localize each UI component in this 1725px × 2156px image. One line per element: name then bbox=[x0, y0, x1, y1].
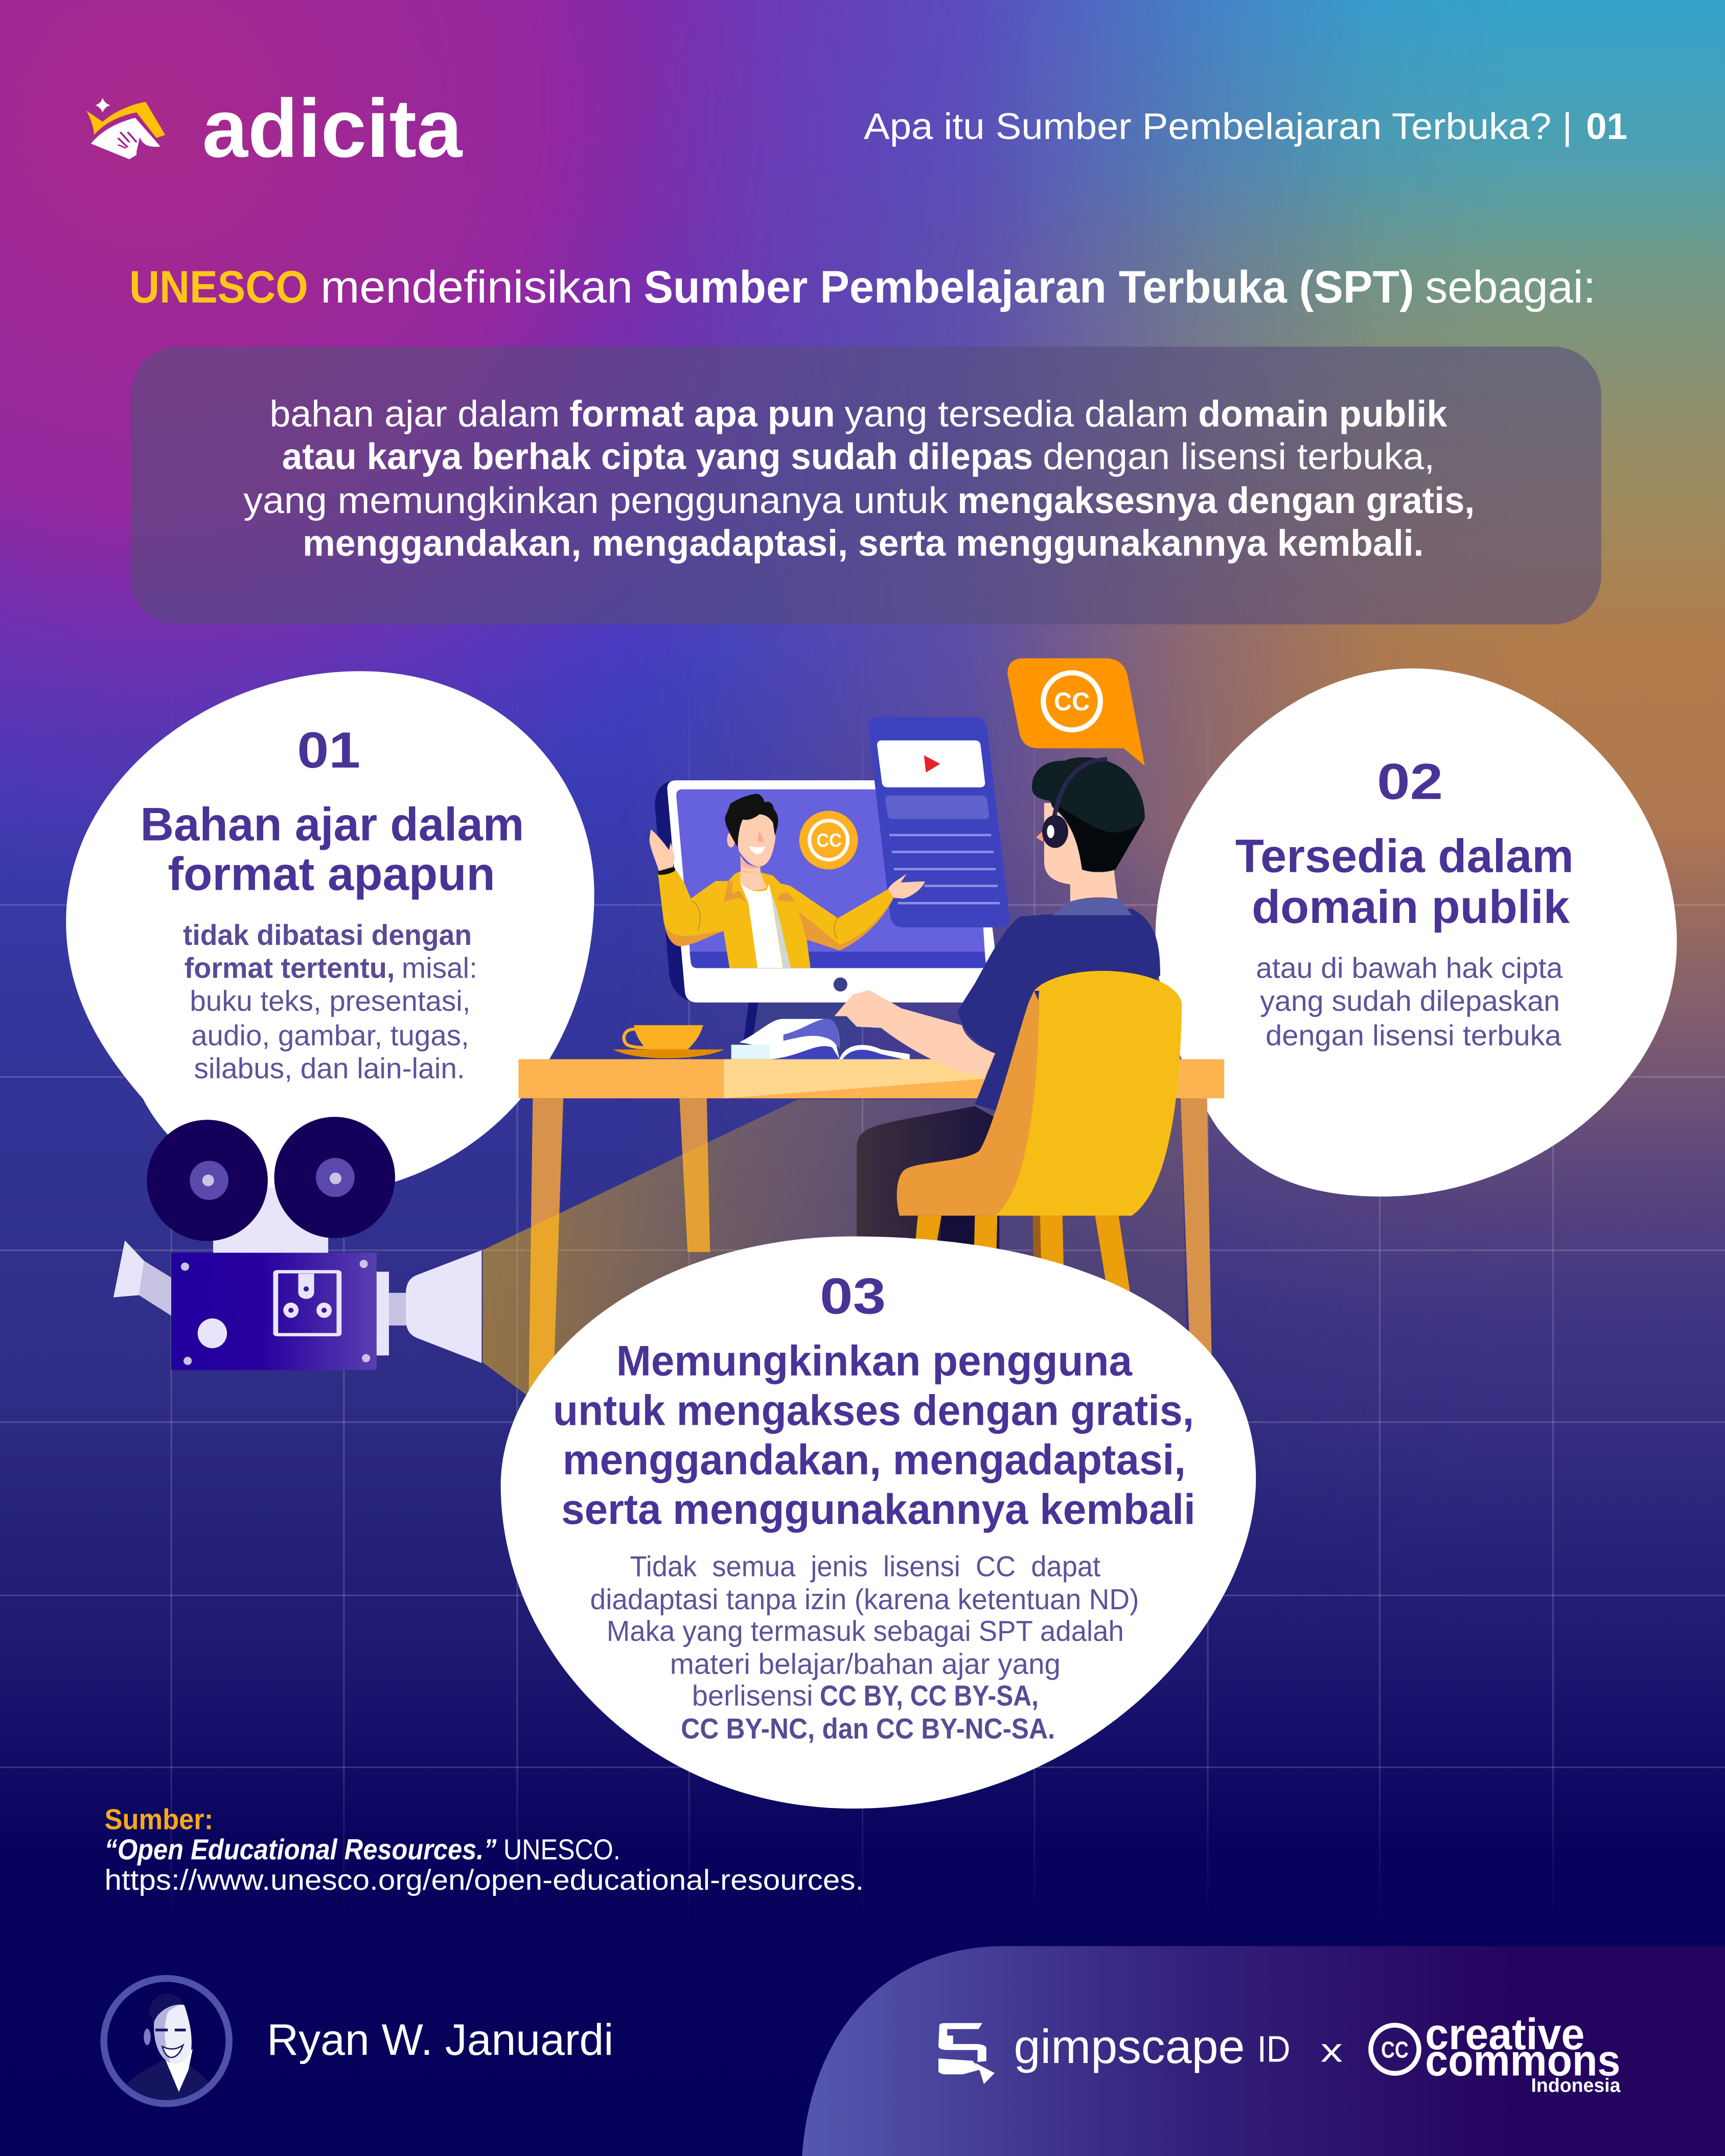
monitor bbox=[655, 780, 995, 1048]
heading 03: untuk mengakses dengan gratis, bbox=[553, 1386, 1194, 1434]
main title: Sumber Pembelajaran Terbuka (SPT) bbox=[644, 262, 1414, 312]
main title bbox=[129, 262, 1596, 312]
definition text: domain publik bbox=[1198, 393, 1447, 434]
source citation: “Open Educational Resources.” bbox=[105, 1834, 497, 1866]
icon: gimpscape bbox=[938, 2023, 995, 2084]
body 03: Maka yang termasuk sebagai SPT adalah bbox=[607, 1615, 1124, 1647]
panel: point 02 bubble bbox=[1156, 668, 1677, 1196]
creative commons logo: commons bbox=[1425, 2036, 1620, 2085]
header: series title: Apa itu Sumber Pembelajaran Terbuka? | bbox=[864, 106, 1572, 147]
wordmark: adicita bbox=[202, 83, 463, 175]
creative commons logo: CC bbox=[1381, 2036, 1409, 2062]
number 01: 01 bbox=[297, 722, 360, 779]
body 01 bbox=[183, 919, 477, 1084]
desk top bbox=[519, 1059, 1224, 1098]
chair bbox=[897, 971, 1182, 1304]
right table leg bbox=[1181, 1098, 1212, 1378]
body 03: CC BY, CC BY-SA, bbox=[820, 1679, 1039, 1711]
film reel right bbox=[274, 1117, 395, 1238]
definition text: bahan ajar dalam bbox=[270, 393, 560, 434]
learner figure bbox=[834, 757, 1160, 1304]
definition text: dengan lisensi terbuka, bbox=[1043, 436, 1435, 477]
body 02: yang sudah dilepaskan bbox=[1260, 985, 1560, 1017]
open book bbox=[731, 1019, 910, 1059]
definition text: yang tersedia dalam bbox=[845, 393, 1188, 434]
source citation bbox=[105, 1803, 864, 1896]
icon: cc speech bubble bbox=[1007, 658, 1145, 766]
table legs bbox=[528, 1098, 710, 1392]
camera back bbox=[139, 1261, 171, 1316]
panel: point 03 bubble bbox=[501, 1237, 1256, 1809]
gimpscape wordmark: gimpscape bbox=[1014, 2020, 1245, 2073]
heading 02 bbox=[1235, 830, 1574, 933]
header: logo adicita bbox=[86, 83, 463, 175]
body 03: CC BY-NC, dan CC BY-NC-SA. bbox=[681, 1712, 1055, 1745]
heading 03: Memungkinkan pengguna bbox=[616, 1336, 1133, 1384]
definition text: menggandakan, mengadaptasi, serta menggunakannya kembali. bbox=[303, 522, 1424, 564]
definition text: yang memungkinkan penggunanya untuk bbox=[243, 480, 948, 521]
body 02: atau di bawah hak cipta bbox=[1256, 952, 1563, 984]
creative commons logo: Indonesia bbox=[1531, 2075, 1621, 2096]
body 02 bbox=[1256, 952, 1563, 1051]
main title: mendefinisikan bbox=[320, 262, 633, 312]
heading 03 bbox=[553, 1336, 1195, 1533]
camera lens bbox=[377, 1250, 481, 1363]
heading 01: Bahan ajar dalam bbox=[141, 798, 524, 850]
illustration: film camera bbox=[113, 1117, 481, 1370]
body 01: buku teks, presentasi, bbox=[190, 985, 470, 1017]
body 03: diadaptasi tanpa izin (karena ketentuan ND) bbox=[590, 1583, 1139, 1615]
definition text: mengaksesnya dengan gratis, bbox=[957, 480, 1475, 521]
heading 03: serta menggunakannya kembali bbox=[561, 1485, 1195, 1533]
gimpscape wordmark: ID bbox=[1257, 2028, 1291, 2070]
source citation: Sumber: bbox=[105, 1803, 213, 1836]
film reel left bbox=[147, 1120, 268, 1241]
heading 02: Tersedia dalam bbox=[1235, 830, 1574, 882]
icon: cc coin bbox=[799, 811, 858, 869]
heading 02: domain publik bbox=[1252, 881, 1570, 933]
definition text: format apa pun bbox=[569, 393, 835, 434]
definition text bbox=[243, 393, 1475, 564]
main title: sebagai: bbox=[1425, 262, 1596, 312]
body 01: silabus, dan lain-lain. bbox=[194, 1052, 465, 1084]
number 02: 02 bbox=[1377, 754, 1443, 810]
camera body bbox=[171, 1253, 377, 1370]
author avatar bbox=[104, 1979, 229, 2118]
heading 03: menggandakan, mengadaptasi, bbox=[563, 1435, 1186, 1483]
panel: footer partner logos bbox=[802, 1946, 1725, 2156]
author name: Ryan W. Januardi bbox=[267, 2015, 613, 2065]
body 03 bbox=[590, 1550, 1139, 1745]
panel: definition bbox=[131, 346, 1601, 624]
camera neck bbox=[213, 1188, 328, 1253]
body 01: audio, gambar, tugas, bbox=[191, 1019, 469, 1051]
body 03: berlisensi bbox=[692, 1679, 813, 1711]
creative commons logo: creative bbox=[1425, 2010, 1584, 2059]
presenter on screen bbox=[650, 794, 925, 968]
heading 01 bbox=[141, 798, 524, 900]
body 01: tidak dibatasi dengan bbox=[183, 919, 472, 951]
heading 01: format apapun bbox=[168, 848, 495, 900]
body 01: format tertentu, bbox=[185, 952, 395, 984]
body 01: misal: bbox=[402, 952, 477, 984]
number 03: 03 bbox=[820, 1268, 886, 1325]
source citation: UNESCO. bbox=[503, 1834, 620, 1866]
creative commons logo bbox=[1371, 2010, 1621, 2096]
icon: cc coin: CC bbox=[816, 830, 842, 851]
body 03: Tidak semua jenis lisensi CC dapat bbox=[630, 1550, 1100, 1582]
header: series title: 01 bbox=[1586, 106, 1627, 147]
cup on saucer bbox=[613, 1025, 724, 1058]
times sign: x bbox=[1321, 2032, 1343, 2069]
panel: point 01 bubble bbox=[66, 671, 594, 1195]
icon: cc speech bubble: CC bbox=[1054, 687, 1090, 716]
definition text: atau karya berhak cipta yang sudah dilepas bbox=[282, 436, 1033, 477]
illustration: desk, monitor and learner bbox=[482, 658, 1224, 1515]
projector light beam bbox=[482, 1100, 1191, 1515]
source citation: https://www.unesco.org/en/open-educational-resources. bbox=[105, 1864, 864, 1896]
body 02: dengan lisensi terbuka bbox=[1266, 1019, 1561, 1051]
side video panel bbox=[868, 717, 1009, 928]
main title: UNESCO bbox=[129, 262, 308, 312]
icon: adicita book and hand bbox=[86, 98, 165, 159]
body 03: materi belajar/bahan ajar yang bbox=[670, 1648, 1061, 1680]
